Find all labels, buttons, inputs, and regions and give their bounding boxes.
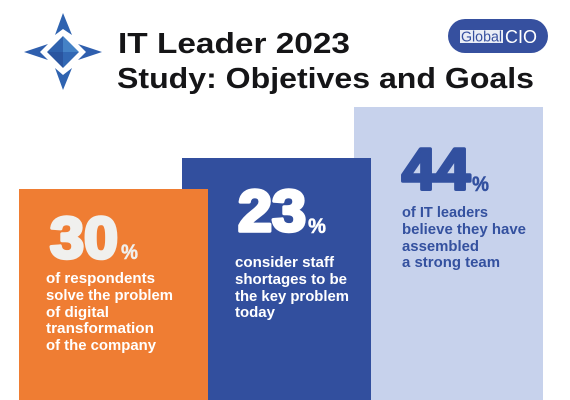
44 description: a strong team (402, 254, 500, 271)
panel: 30 percent orange (19, 189, 208, 400)
23 description: shortages to be (235, 271, 347, 288)
logo: GlobalCIO badge: Global (461, 30, 502, 46)
30 description: of the company (46, 337, 157, 354)
logo: four-point star (24, 13, 102, 90)
44 description: of IT leaders (402, 204, 488, 221)
30 description: of digital (46, 304, 109, 321)
30 description: transformation (46, 320, 154, 337)
30 description: of respondents (46, 270, 155, 287)
title (117, 28, 534, 95)
23 number: 23 (238, 179, 306, 244)
percent sign: % (472, 173, 489, 196)
title: Study: Objetives and Goals (117, 63, 534, 95)
percent sign: % (308, 215, 326, 238)
panel: 23 percent dark blue (182, 158, 371, 400)
percent sign: % (121, 241, 138, 264)
30 description: solve the problem (46, 287, 173, 304)
30 number: 30 (50, 206, 118, 271)
44 description: assembled (402, 238, 479, 255)
23 description (235, 254, 349, 321)
title: IT Leader 2023 (118, 28, 350, 60)
logo: GlobalCIO badge (448, 19, 548, 53)
23 description: the key problem (235, 288, 349, 305)
panel: 44 percent light blue (354, 107, 543, 400)
logo: GlobalCIO badge: CIO (505, 27, 537, 47)
44 description (402, 204, 526, 271)
30 description (46, 270, 173, 354)
23 description: consider staff (235, 254, 335, 271)
23 description: today (235, 304, 276, 321)
44 number: 44 (402, 137, 470, 202)
44 description: believe they have (402, 221, 526, 238)
